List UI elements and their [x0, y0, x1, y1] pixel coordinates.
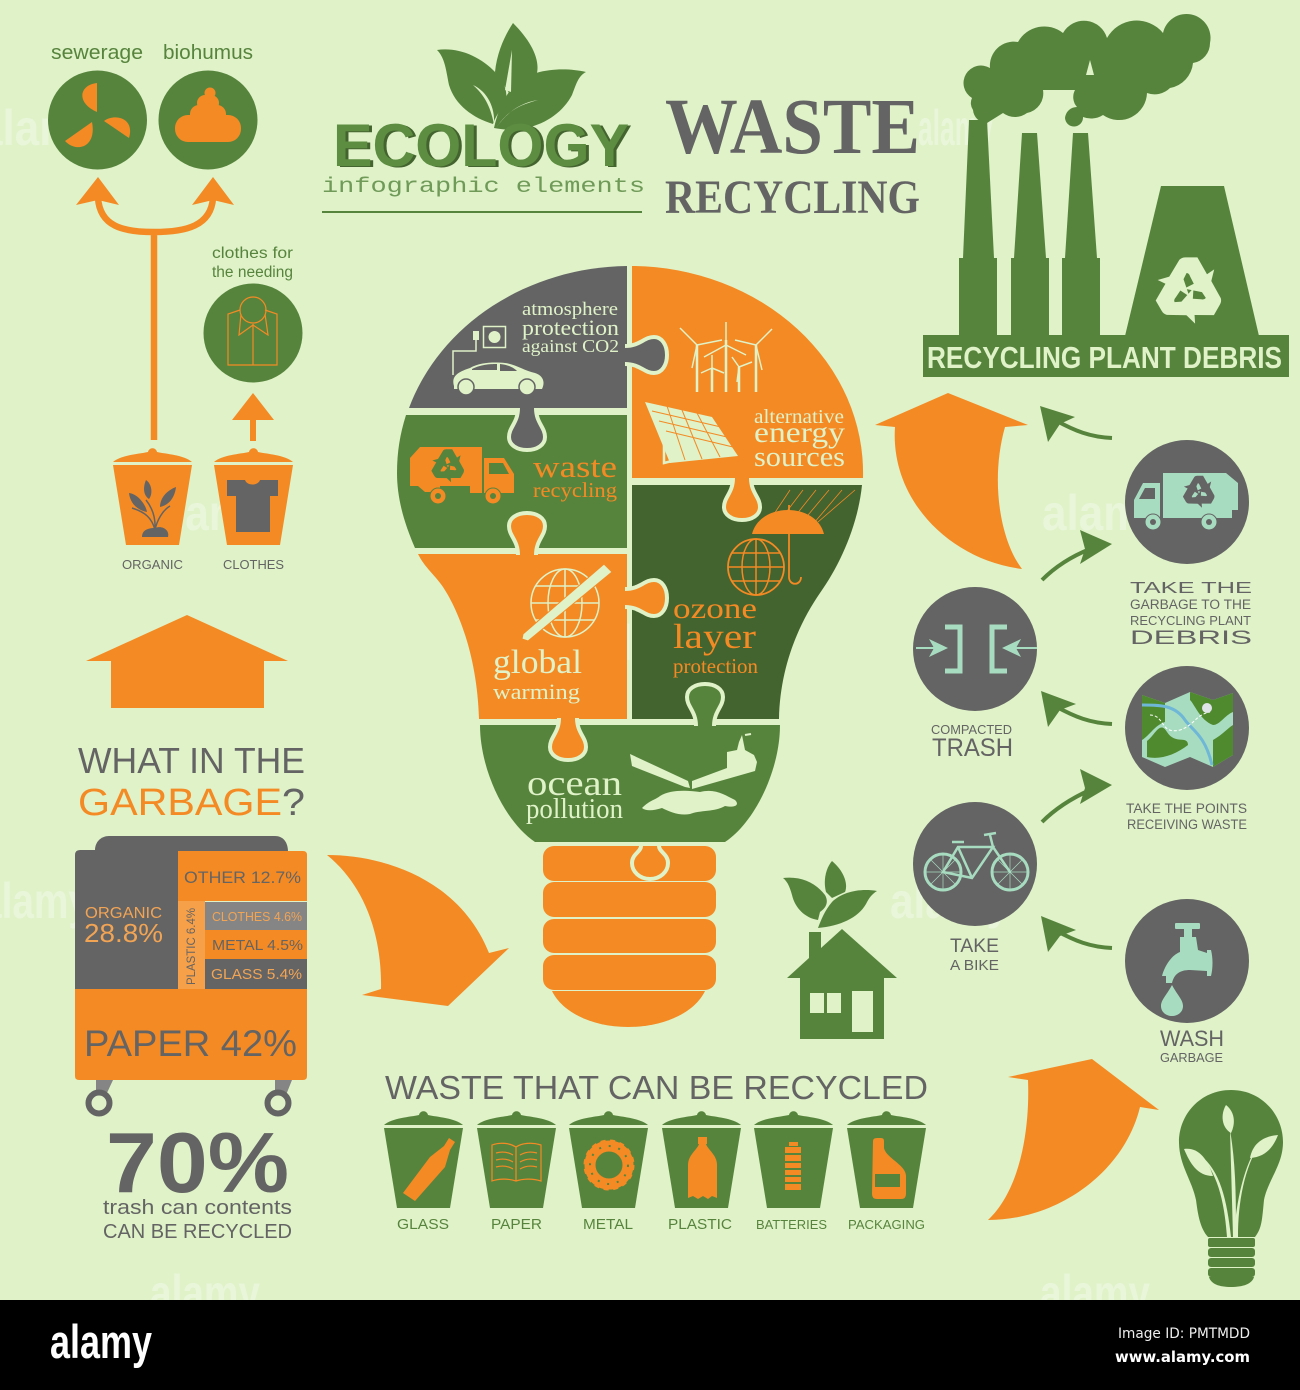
panel: recycling plant: [923, 14, 1289, 377]
heading: [78, 740, 305, 824]
chart: trash can treemap: GLASS 5.4%: [211, 966, 302, 983]
text: alternative energy sources: sources: [754, 442, 845, 473]
arrow: green 3: [1041, 691, 1112, 727]
icon: wind turbines: [680, 322, 772, 392]
icon: truck: [410, 447, 514, 504]
text: global warming: global: [493, 644, 582, 681]
text: take the garbage: TAKE THE: [1130, 580, 1252, 597]
icon: green light bulb: [1179, 1090, 1283, 1287]
text: ozone layer protection: [673, 592, 758, 678]
step: truck: [1125, 440, 1249, 564]
icon: organic bucket: [113, 448, 192, 545]
chart: trash can treemap: PLASTIC 6.4%: [184, 908, 198, 985]
bin: batteries: BATTERIES: [756, 1217, 827, 1232]
step: bike: [913, 802, 1037, 926]
text: take a bike: TAKE: [950, 936, 999, 957]
text: ocean pollution: ocean: [527, 763, 622, 803]
panel: waste recycling: [397, 415, 627, 548]
chart: central light bulb puzzle: [397, 266, 863, 1027]
heading: ECOLOGY: ECOLOGY: [336, 113, 632, 180]
text: take the garbage: [1130, 580, 1252, 649]
stat: 70 percent: CAN BE RECYCLED: [103, 1221, 292, 1243]
arrow: green 2: [1042, 530, 1112, 580]
text: waste recycling: recycling: [533, 478, 618, 502]
arrow: garbage to bulb: [327, 855, 509, 1006]
watermark: alamy: [1042, 485, 1167, 541]
icon: sewerage circle: sewerage: [51, 42, 143, 64]
bin: metal: [569, 1111, 648, 1233]
step: map: [1125, 666, 1249, 790]
text: ozone layer protection: ozone: [673, 592, 757, 625]
labels: bucket names: CLOTHES: [223, 557, 284, 572]
bin: metal: METAL: [583, 1217, 633, 1233]
icon: solar panel: [645, 402, 738, 463]
bin: glass: [384, 1111, 463, 1233]
text: waste recycling: [533, 449, 618, 502]
title: ecology logo: [322, 23, 645, 213]
heading: WHAT IN THE: [78, 740, 305, 781]
chart: trash can treemap: [75, 836, 307, 1114]
text: ocean pollution: pollution: [526, 794, 623, 825]
arrow: clothes up: [232, 393, 274, 441]
footer bar: [0, 1300, 1300, 1390]
arrow: big up: [86, 615, 288, 708]
text: clothes for the needing: clothes for: [212, 245, 293, 262]
icon: electric car: [453, 326, 544, 395]
bin: plastic: PLASTIC: [668, 1217, 732, 1233]
footer image id: Image ID: PMTMDD: [1118, 1326, 1250, 1342]
stat: 70 percent: trash can contents: [103, 1197, 292, 1219]
icon: globe and thermometer: [522, 564, 612, 641]
watermark: alamy: [150, 485, 270, 541]
heading: GARBAGE ?: [78, 782, 305, 824]
arrow: to recycling plant: [875, 393, 1028, 569]
text: waste recycling: waste: [533, 449, 617, 484]
panel: what in the garbage: [75, 740, 307, 1243]
text: take the garbage: RECYCLING PLANT: [1130, 613, 1251, 628]
bin: paper: PAPER: [491, 1217, 542, 1233]
icon: sewerage circle: [48, 42, 147, 170]
icon: clothes bucket: [214, 448, 293, 545]
stat: 70 percent: 70%: [106, 1116, 289, 1211]
footer logo: alamy: [50, 1315, 152, 1368]
arrow: green 4: [1042, 769, 1112, 822]
text: global warming: warming: [493, 679, 580, 704]
icon: biohumus circle: biohumus: [163, 42, 253, 64]
footer url: www.alamy.com: [1115, 1348, 1250, 1366]
arrow: organic branching: [76, 177, 234, 440]
panel: waste that can be recycled: [384, 1069, 928, 1233]
panel: ocean pollution: [480, 725, 780, 842]
icon: shirt circle: [204, 284, 302, 382]
subtitle: infographic elements: [322, 176, 645, 199]
chart: trash can treemap: CLOTHES 4.6%: [212, 909, 302, 924]
text: take the points: [1126, 801, 1247, 832]
text: take the garbage: DEBRIS: [1130, 628, 1252, 649]
panel: waste path steps: [913, 406, 1252, 1065]
text: ocean pollution: [526, 763, 623, 825]
icon: house with leaves: [783, 861, 897, 1039]
text: take the points: TAKE THE POINTS: [1126, 801, 1247, 816]
bin: batteries: [754, 1111, 833, 1232]
icon: umbrella and globe: [728, 490, 855, 595]
panel: ozone layer: [632, 485, 862, 719]
heading: waste recycling: [665, 84, 920, 224]
text: take the points: RECEIVING WASTE: [1127, 817, 1247, 832]
heading: ECOLOGY: ECOLOGY: [333, 112, 629, 179]
heading: waste recycling: WASTE: [665, 84, 920, 171]
watermark: [0, 100, 1167, 1321]
heading: waste recycling: RECYCLING: [665, 171, 920, 224]
chart: trash can treemap: PAPER 42%: [84, 1023, 297, 1064]
text: alternative energy sources: [754, 406, 845, 473]
text: clothes for the needing: [212, 245, 293, 281]
text: global warming: [493, 644, 582, 704]
icon: broken ship and oil slick: [630, 734, 757, 815]
panel: global warming: [418, 554, 627, 719]
bulb screw base: [543, 846, 716, 1027]
watermark: alamy: [918, 100, 993, 156]
text: atmosphere: atmosphere: [522, 299, 618, 320]
panel: organic and clothes flows: [48, 42, 302, 708]
watermark: alamy: [596, 615, 721, 671]
bin: paper: [477, 1111, 556, 1233]
chart: trash can treemap: 28.8%: [84, 918, 163, 948]
chart: trash can treemap: OTHER 12.7%: [184, 868, 301, 887]
labels: bucket names: [122, 557, 284, 572]
heading: WASTE THAT CAN BE RECYCLED: [385, 1069, 928, 1106]
icon: biohumus circle: [158, 42, 258, 170]
arrow: green 5: [1041, 916, 1112, 952]
text: clothes for the needing: the needing: [212, 264, 293, 281]
labels: bucket names: ORGANIC: [122, 557, 183, 572]
text: ozone layer protection: layer: [673, 617, 756, 656]
watermark: alamy: [150, 1265, 260, 1321]
icon: chimneys: [959, 120, 1100, 336]
text: compacted trash: TRASH: [932, 734, 1013, 762]
text: atmosphere: against CO2: [522, 336, 619, 356]
icon: logo leaves: [437, 23, 586, 130]
text: wash garbage: WASH: [1160, 1026, 1224, 1051]
chart: trash can treemap: METAL 4.5%: [212, 937, 303, 954]
bin: glass: GLASS: [397, 1217, 449, 1233]
text: compacted trash: [931, 722, 1013, 762]
text: wash garbage: GARBAGE: [1160, 1050, 1223, 1065]
bin: packaging: PACKAGING: [848, 1217, 925, 1232]
text: take the garbage: GARBAGE TO THE: [1130, 597, 1251, 612]
panel: alternative energy: [632, 266, 863, 478]
text: atmosphere: [522, 299, 619, 356]
text: ozone layer protection: protection: [673, 654, 758, 678]
watermark: alamy: [890, 873, 1010, 929]
step: compacted trash: [913, 587, 1037, 711]
arrow: lower right: [988, 1059, 1159, 1220]
text: compacted trash: COMPACTED: [931, 722, 1012, 737]
text: wash garbage: [1160, 1026, 1224, 1065]
stat: 70 percent: [103, 1116, 292, 1243]
watermark: alamy: [1040, 1265, 1150, 1321]
panel: atmosphere protection: [409, 266, 627, 408]
text: atmosphere: protection: [522, 315, 619, 340]
icon: smoke: [964, 14, 1211, 127]
icon: cooling tower: [1125, 186, 1259, 336]
text: take a bike: [950, 936, 999, 974]
text: alternative energy sources: alternative: [754, 406, 844, 428]
step: faucet: [1125, 899, 1249, 1023]
text: alternative energy sources: energy: [754, 416, 845, 449]
bin: plastic: [662, 1111, 741, 1233]
text: take a bike: A BIKE: [950, 957, 999, 974]
chart: trash can treemap: ORGANIC: [85, 905, 162, 922]
arrow: green 1: [1040, 406, 1112, 442]
icon: recycle symbol: [1147, 257, 1228, 330]
bin: packaging: [847, 1111, 926, 1232]
puzzle connectors: [509, 337, 760, 760]
